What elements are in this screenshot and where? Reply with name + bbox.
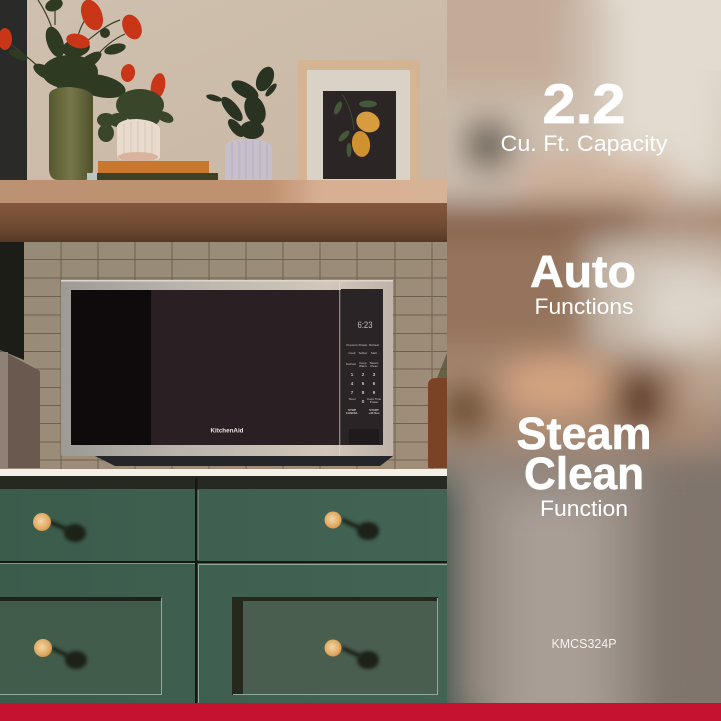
framed lemon print [298, 60, 420, 180]
wall [0, 0, 447, 182]
white planter with plant [97, 89, 175, 162]
knob: upper right [324, 512, 379, 540]
heading: steam clean function: Function [540, 496, 628, 521]
red footer bar [0, 703, 721, 721]
lower left recessed panel [0, 597, 162, 695]
kitchen photo: left side [0, 0, 447, 703]
white countertop [0, 469, 447, 476]
lower right recessed panel [232, 597, 438, 695]
control panel keypad: START [369, 408, 379, 412]
knob: upper left [33, 513, 86, 542]
control panel keypad: Soften [359, 351, 368, 355]
control panel keypad: Steam [370, 361, 379, 365]
control panel keypad: STOP [348, 408, 356, 412]
control panel keypad: Defrost [346, 362, 356, 366]
heading: steam clean function: Clean [524, 448, 644, 499]
control panel keypad: CANCEL [346, 411, 358, 415]
dark door frame [0, 0, 27, 181]
heading: auto functions [530, 246, 636, 319]
heading: auto functions: Auto [530, 246, 636, 297]
knob: lower right [324, 640, 379, 669]
control panel keypad: 2 [362, 372, 365, 377]
lilac planter with plant [205, 64, 278, 180]
microwave door window [151, 290, 339, 445]
control panel keypad: Power [370, 400, 378, 404]
backsplash tile [0, 242, 447, 470]
control panel keypad: 0 [362, 399, 365, 404]
control panel keypad: Reheat [369, 343, 379, 347]
handle slot [349, 429, 379, 444]
control panel keypad: 4 [351, 381, 354, 386]
control panel keypad: 3 [373, 372, 376, 377]
cabinet gaps [195, 478, 198, 703]
control panel keypad: Melt [371, 351, 377, 355]
heading: 2.2 capacity: 2.2 [542, 72, 626, 135]
control panel keypad: Clean [370, 364, 378, 368]
microwave feet shadow [95, 456, 393, 466]
heading: 2.2 capacity [500, 72, 668, 156]
control panel keypad: 1 [351, 372, 354, 377]
stack of books [87, 161, 218, 181]
brand logo: KitchenAid [210, 428, 244, 434]
control panel keypad: Popcorn [346, 343, 358, 347]
control panel keypad: 6 [373, 381, 376, 386]
control panel keypad: 7 [351, 390, 354, 395]
heading: 2.2 capacity: Cu. Ft. Capacity [500, 131, 668, 156]
control panel keypad: Cook [348, 351, 356, 355]
vase with red flowers [0, 0, 168, 180]
control panel keypad: Timer [348, 397, 356, 401]
blurred panel: right side [447, 0, 721, 703]
heading: auto functions: Functions [534, 294, 634, 319]
wood shelf [0, 180, 447, 242]
control panel keypad: 5 [362, 381, 365, 386]
wooden box at left [0, 350, 40, 468]
control panel keypad: +30 Sec [368, 411, 380, 415]
heading: steam clean function [516, 408, 652, 521]
microwave [61, 280, 393, 466]
control panel keypad: Potato [359, 343, 368, 347]
clock: 6:23 [358, 320, 372, 330]
control panel keypad: Warm [359, 364, 367, 368]
control panel keypad: 9 [373, 390, 376, 395]
control panel keypad: Cook Time [367, 397, 381, 401]
dark left panel [0, 242, 24, 360]
cabinets [0, 476, 447, 703]
cutting board and plant [428, 378, 447, 468]
control panel keypad: 8 [362, 390, 365, 395]
heading: steam clean function: Steam [516, 408, 652, 459]
model number: KMCS324P [552, 636, 616, 651]
control panel [341, 289, 383, 445]
olive vase [49, 87, 93, 180]
control panel keypad [346, 343, 381, 415]
knob: lower left [34, 639, 87, 669]
cabinet shadow under counter [0, 476, 447, 489]
control panel keypad: Keep [359, 361, 367, 365]
